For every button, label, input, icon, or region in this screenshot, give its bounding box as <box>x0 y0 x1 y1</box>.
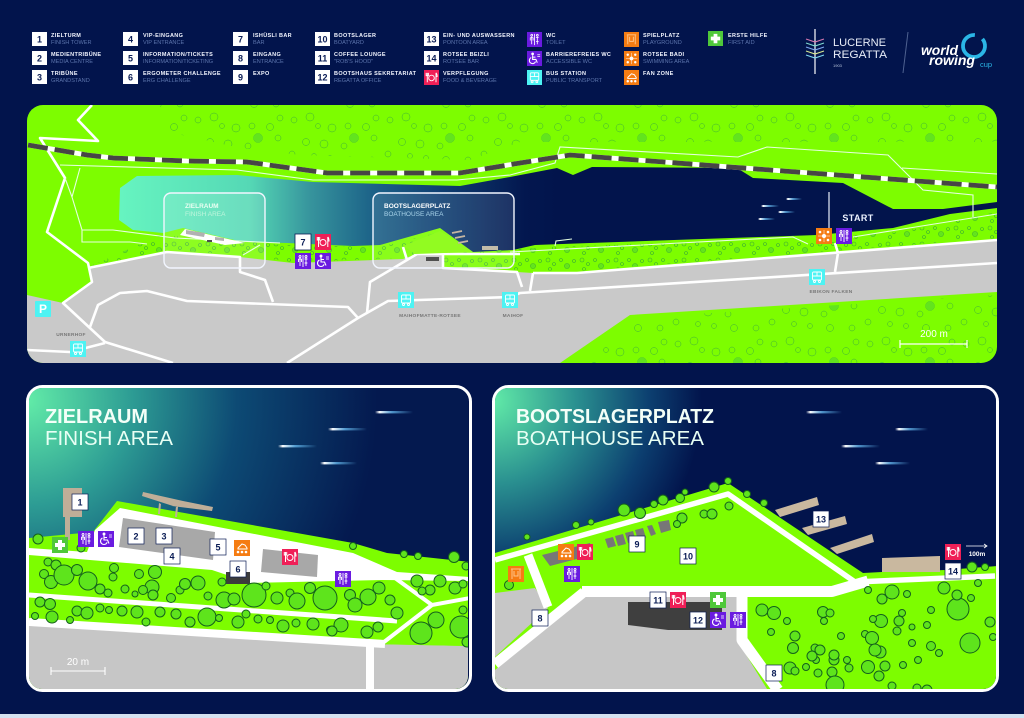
legend item 3: 3 <box>37 72 42 82</box>
label 6 <box>230 561 246 577</box>
legend item bus <box>527 70 603 85</box>
label 8 south: 8 <box>771 668 777 678</box>
legend item 3: GRANDSTAND <box>51 78 90 84</box>
legend item food: VERPFLEGUNG <box>443 71 489 77</box>
finish area land <box>180 229 245 245</box>
legend item 14: ROTSEE BAR <box>443 59 479 65</box>
icon: WC <box>78 531 94 547</box>
logo: Lucerne Regatta: 1903 <box>833 63 843 68</box>
legend item 11: 11 <box>318 54 327 64</box>
legend item 6: 6 <box>128 72 133 82</box>
arrow: 100 m to Rotsee bar <box>966 544 987 558</box>
roads <box>495 494 995 690</box>
logo: World Rowing Cup: cup <box>980 60 992 69</box>
lake <box>119 167 997 252</box>
paths <box>29 578 470 691</box>
stop labels: EBIKON FALKEN <box>809 289 853 295</box>
panel: overview map <box>27 105 997 363</box>
legend item 11 <box>315 51 386 65</box>
icon: WC expo <box>564 566 580 582</box>
legend item 10: BOOTSLAGER <box>334 33 376 39</box>
legend item 9: 9 <box>238 72 243 82</box>
south forest <box>585 295 997 363</box>
legend item 10: 10 <box>317 34 328 44</box>
road area <box>27 240 997 363</box>
scale 200 m <box>900 329 967 348</box>
legend item 8: 8 <box>238 54 243 64</box>
legend item 8 <box>233 51 284 65</box>
icon: accessible WC <box>98 531 114 547</box>
panel: boathouse area <box>493 386 998 695</box>
legend item swimming: SWIMMING AREA <box>643 59 690 65</box>
boats <box>806 411 928 464</box>
trees <box>32 534 472 647</box>
legend item 3: TRIBÜNE <box>51 70 78 77</box>
label 1: 1 <box>77 498 83 508</box>
legend item 13: PONTOON AREA <box>443 40 488 46</box>
icon: first aid <box>710 592 726 608</box>
north forest <box>160 105 997 160</box>
expo stands <box>542 520 671 566</box>
label 8 west: 8 <box>537 614 543 624</box>
arrow: 100 m to Rotsee bar: 100m <box>969 551 986 558</box>
gray left <box>495 588 548 657</box>
legend item 12: REGATTA OFFICE <box>334 78 382 84</box>
legend item WC: TOILET <box>546 40 566 46</box>
focus box: finish area <box>164 193 265 268</box>
legend item 7: ISHÜSLI BAR <box>253 32 292 39</box>
label 3: 3 <box>161 532 167 542</box>
icon: food Rotsee bar <box>945 544 961 560</box>
icon: bus Maihofmatte <box>398 292 414 308</box>
icon: bus Maihof <box>502 292 518 308</box>
icon: bus Urnerhof <box>70 341 86 357</box>
label 13 <box>813 511 829 527</box>
finish tower <box>63 488 82 540</box>
label 5: 5 <box>215 542 221 552</box>
logo: Lucerne Regatta <box>806 29 888 74</box>
stop labels: MAIHOF <box>503 313 523 319</box>
label 11: 11 <box>653 596 663 606</box>
legend item first aid <box>708 31 768 46</box>
legend item 7: BAR <box>253 40 265 46</box>
label 14 <box>945 563 961 579</box>
legend item fan zone <box>624 70 674 85</box>
boathouse details <box>403 231 498 261</box>
stop labels: MAIHOFMATTE-ROTSEE <box>399 313 461 319</box>
panel: finish area <box>27 386 472 691</box>
label 3 <box>156 528 172 544</box>
legend item 4: 4 <box>128 34 133 44</box>
focus box: boathouse area: BOATHOUSE AREA <box>384 211 444 218</box>
boats on the lake <box>758 198 802 220</box>
heading: ZIELRAUM <box>45 406 148 428</box>
label 9 <box>629 536 645 552</box>
icon: fan zone <box>234 540 250 556</box>
legend item swimming: ROTSEE BADI <box>643 52 685 58</box>
legend item 2: MEDIA CENTRE <box>51 59 93 65</box>
label 5 <box>210 539 226 555</box>
legend item 2: MEDIENTRIBÜNE <box>51 51 101 58</box>
gray ground <box>29 620 470 691</box>
legend item 13: 13 <box>426 34 437 44</box>
legend item 8: ENTRANCE <box>253 59 284 65</box>
trees <box>504 478 996 695</box>
legend item 5: INFORMATION/TICKETS <box>143 52 213 58</box>
icon: parking <box>35 301 51 317</box>
legend item 6: ERGOMETER CHALLENGE <box>143 71 221 77</box>
label 6: 6 <box>235 564 241 574</box>
label 12: 12 <box>693 616 703 626</box>
label 10: 10 <box>683 552 693 562</box>
legend item 14: 14 <box>426 54 437 64</box>
legend item 12: 12 <box>317 72 328 82</box>
start line <box>828 192 830 228</box>
logo: Lucerne Regatta: REGATTA <box>833 49 888 61</box>
label: start: START <box>842 213 874 223</box>
legend item 11: "ROB'S HOOD" <box>334 59 373 65</box>
roads and paths <box>27 105 997 363</box>
legend item first aid: FIRST AID <box>728 40 755 46</box>
legend item 3 <box>32 70 90 84</box>
legend item 1: FINISH TOWER <box>51 40 92 46</box>
label 11 <box>650 592 666 608</box>
icon: food coffee lounge <box>670 592 686 608</box>
legend item 5: INFORMATION/TICKETING <box>143 59 213 65</box>
land <box>495 483 998 691</box>
legend item 5: 5 <box>128 54 133 64</box>
legend item 2: 2 <box>37 54 42 64</box>
legend item 6 <box>123 70 221 84</box>
legend item playground: PLAYGROUND <box>643 40 682 46</box>
railway <box>28 145 997 187</box>
legend item bus: PUBLIC TRANSPORT <box>546 78 603 84</box>
erg building <box>226 572 250 584</box>
boats <box>278 411 413 464</box>
icon: food expo <box>577 544 593 560</box>
legend item 13: EIN- UND AUSWASSERN <box>443 33 515 39</box>
legend item 1: 1 <box>37 34 42 44</box>
icon: WC office <box>730 612 746 628</box>
stop labels: URNERHOF <box>56 332 86 338</box>
legend item bus: BUS STATION <box>546 71 586 77</box>
icon: parking: P <box>39 302 47 316</box>
heading <box>516 406 714 450</box>
scale 200 m: 200 m <box>920 329 948 340</box>
heading: BOATHOUSE AREA <box>516 428 705 450</box>
focus box: boathouse area: BOOTSLAGERPLATZ <box>384 203 450 210</box>
icon: food <box>282 549 298 565</box>
legend item playground: SPIELPLATZ <box>643 33 680 39</box>
legend item playground <box>624 32 682 47</box>
legend item 7: 7 <box>238 34 243 44</box>
marker cluster: bar 7 <box>295 234 331 269</box>
legend item accessible WC: BARRIEREFREIES WC <box>546 52 611 58</box>
legend item first aid: ERSTE HILFE <box>728 33 768 39</box>
icon: WC start <box>836 228 852 244</box>
legend item 7 <box>233 32 292 46</box>
focus box: finish area: FINISH AREA <box>185 211 226 218</box>
legend item 4: VIP ENTRANCE <box>143 40 185 46</box>
label 2 <box>128 528 144 544</box>
white plaza <box>29 508 470 583</box>
logo: Lucerne Regatta: LUCERNE <box>833 37 886 49</box>
legend item 12 <box>315 70 417 84</box>
legend item 10 <box>315 32 376 46</box>
legend item swimming <box>624 51 690 66</box>
label 4 <box>164 548 180 564</box>
logo: World Rowing Cup: world <box>921 43 959 58</box>
legend item 14 <box>424 51 489 65</box>
label 12 <box>690 612 706 628</box>
logo: World Rowing Cup <box>921 31 992 69</box>
legend item 4 <box>123 32 185 46</box>
legend item 5 <box>123 51 213 65</box>
thin paths <box>60 147 997 255</box>
label 10 <box>680 548 696 564</box>
grandstand building <box>119 518 215 560</box>
legend item accessible WC <box>527 51 611 66</box>
icon: swimming <box>816 228 832 244</box>
focus box: boathouse area <box>373 193 514 268</box>
legend item food: FOOD & BEVERAGE <box>443 78 497 84</box>
legend item 12: BOOTSHAUS SEKRETARIAT <box>334 71 417 77</box>
legend item 8: EINGANG <box>253 52 281 58</box>
icon: accessible WC <box>710 612 726 628</box>
pontoon <box>142 492 213 517</box>
focus box: finish area: ZIELRAUM <box>185 203 219 210</box>
marker cluster: bar 7: 7 <box>300 238 306 248</box>
icon: playground <box>508 566 524 582</box>
legend item 10: BOATYARD <box>334 40 364 46</box>
label 2: 2 <box>133 532 139 542</box>
land <box>29 501 470 691</box>
icon: WC east <box>335 571 351 587</box>
legend item 11: COFFEE LOUNGE <box>334 52 386 58</box>
legend <box>32 31 768 85</box>
legend item 13 <box>424 32 515 46</box>
icon: bus Ebikon <box>809 269 825 285</box>
legend item 14: ROTSEE BEIZLI <box>443 52 489 58</box>
boathouse building <box>628 602 722 630</box>
lakeside tree strip <box>90 212 997 271</box>
legend item WC: WC <box>546 33 556 39</box>
legend item 2 <box>32 51 101 65</box>
logo: World Rowing Cup: rowing <box>929 53 976 68</box>
stop labels <box>56 289 853 338</box>
scale 20 m: 20 m <box>67 657 89 668</box>
icon: first aid <box>52 537 68 553</box>
heading: FINISH AREA <box>45 428 174 450</box>
scale 20 m <box>51 657 105 675</box>
legend item accessible WC: ACCESSIBLE WC <box>546 59 592 65</box>
legend item 4: VIP-EINGANG <box>143 33 183 39</box>
gray main <box>495 597 767 689</box>
right tree field <box>385 644 463 646</box>
food building <box>261 549 318 577</box>
legend item WC <box>527 32 566 47</box>
label 8 south <box>766 665 782 681</box>
legend item food <box>424 70 497 85</box>
icon: fan zone <box>558 544 574 560</box>
label 13: 13 <box>816 514 826 524</box>
label 14: 14 <box>948 566 958 576</box>
label 4: 4 <box>169 552 175 562</box>
legend item 9 <box>233 70 270 84</box>
pontoons <box>775 497 940 572</box>
legend item 6: ERG CHALLENGE <box>143 78 191 84</box>
label 9: 9 <box>634 540 640 550</box>
legend item 1: ZIELTURM <box>51 33 81 39</box>
legend item fan zone: FAN ZONE <box>643 71 674 77</box>
label 1 <box>72 494 88 510</box>
label 8 west <box>532 610 548 626</box>
heading <box>46 409 173 445</box>
legend item 9: EXPO <box>253 71 270 77</box>
heading: BOOTSLAGERPLATZ <box>516 406 714 428</box>
legend item 1 <box>32 32 92 46</box>
